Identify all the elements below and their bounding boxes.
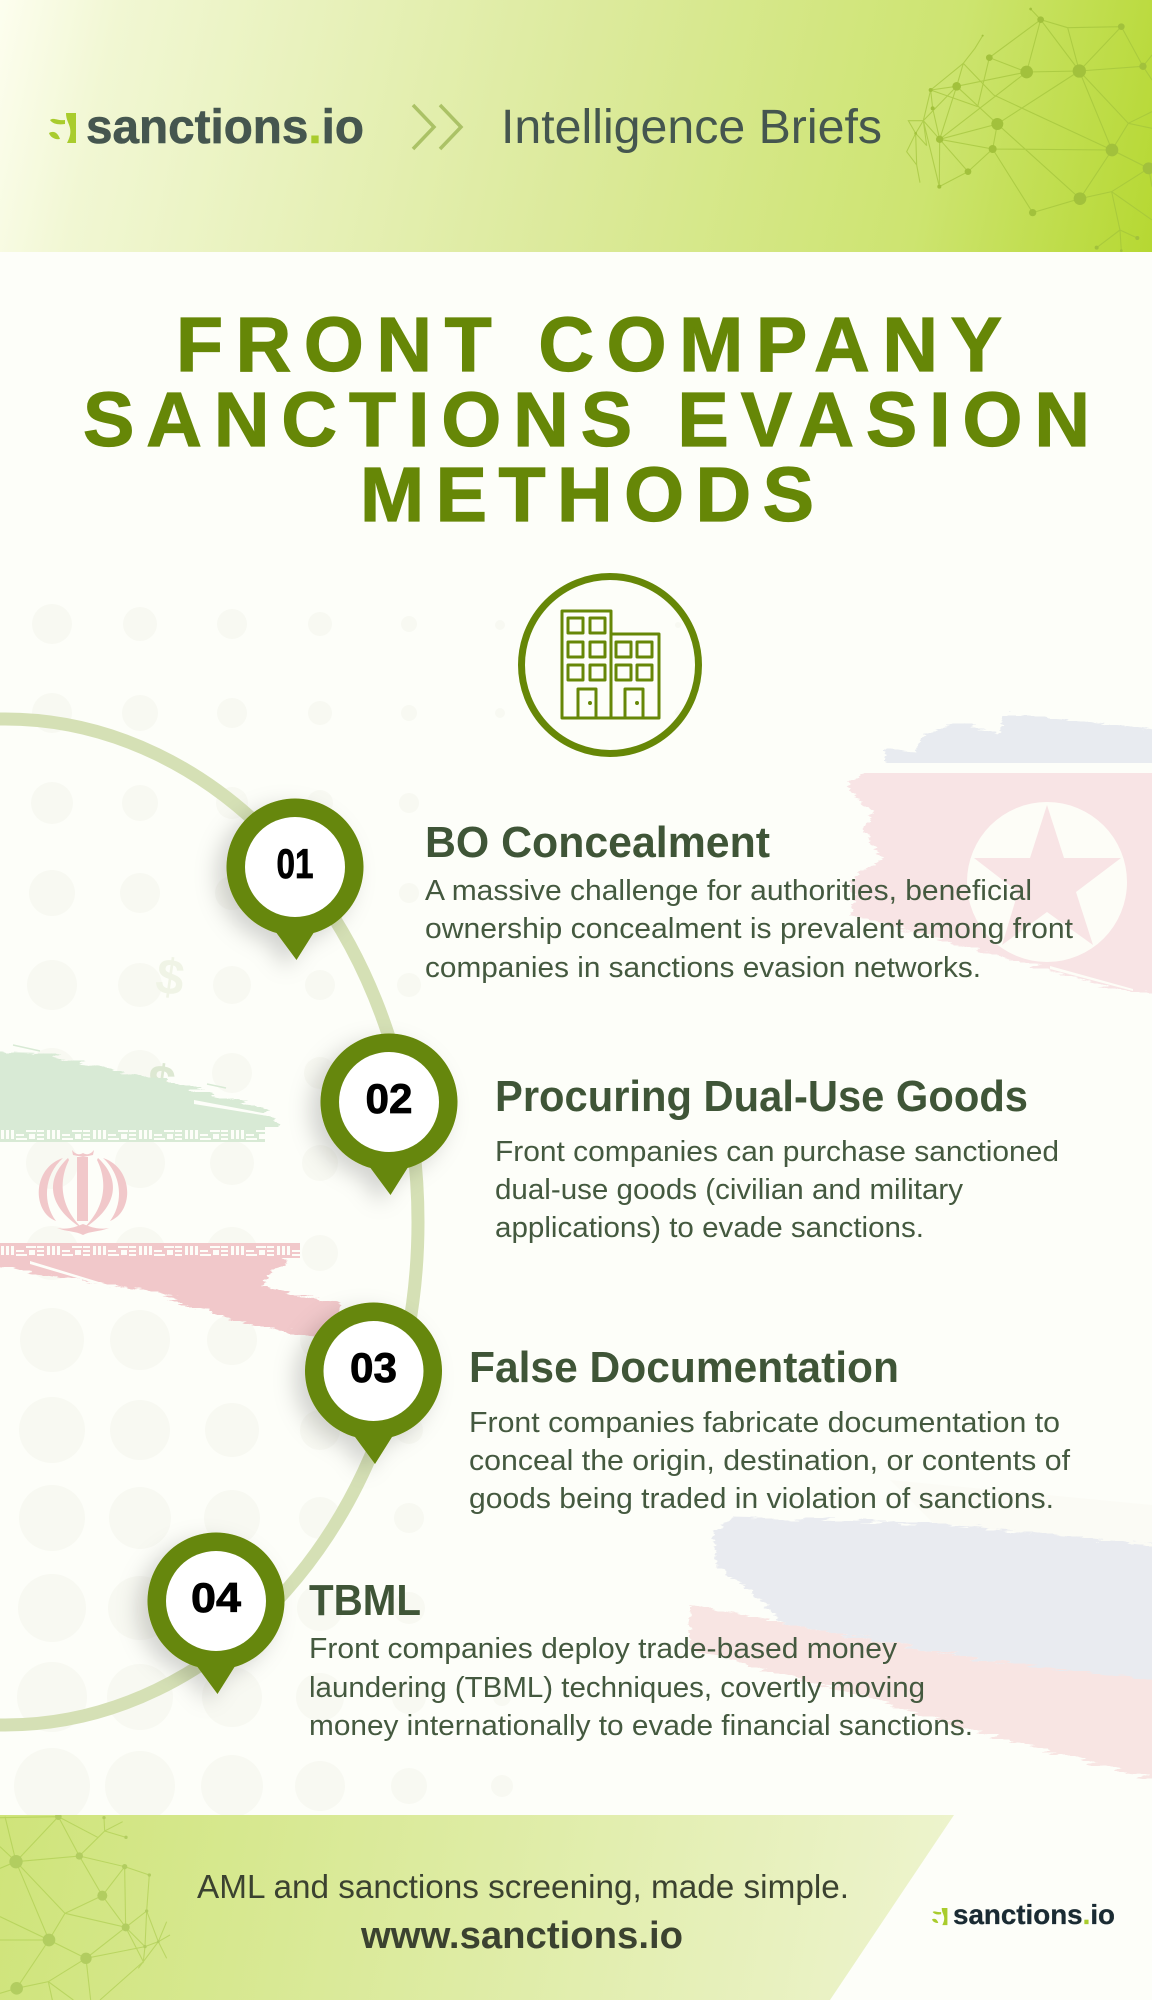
header label: Intelligence Briefs [501,101,882,154]
timeline arc [0,719,418,1725]
step 1 text: BO Concealment [425,818,770,867]
step 4 text: Front companies deploy trade-based money [309,1633,898,1665]
decorative dollar signs: $ [143,1053,179,1113]
step 4 text [309,1576,973,1742]
step 2 text [495,1072,1059,1244]
flag brush: North Korea [844,715,1152,992]
step 1 text: companies in sanctions evasion networks. [425,952,981,984]
step 2 text: Procuring Dual-Use Goods [495,1072,1028,1121]
decorative dollar signs: $ [152,947,188,1007]
pin 03: 03 [350,1344,397,1391]
decorative dollar signs [143,947,188,1113]
pin 04: 04 [191,1574,242,1621]
step 4 text: TBML [309,1576,421,1625]
step 3 text: Front companies fabricate documentation to [469,1407,1060,1439]
step 4 text: laundering (TBML) techniques, covertly moving [309,1672,925,1704]
network graphic [907,8,1152,252]
title: METHODS [360,452,814,538]
footer logo: sanctions.io [953,1899,1115,1930]
step 3 text [469,1343,1071,1515]
step 4 text: money internationally to evade financial sanctions. [309,1710,973,1742]
step 2 text: Front companies can purchase sanctioned [495,1136,1059,1168]
pin 04 [148,1533,284,1694]
pin 01 [226,799,364,960]
step 3 text: False Documentation [469,1343,899,1392]
icon: double chevron arrow [413,105,461,149]
icon: office buildings in circle [522,576,698,754]
background dot pattern [14,604,681,1824]
footer band [0,1813,954,2000]
flag brush: Russia [690,1480,1152,1785]
step 1 text: A massive challenge for authorities, beneficial [425,875,1032,907]
logo: sanctions.io: sanctions.io [86,101,364,154]
pin 03 [305,1303,442,1464]
step 1 text [425,818,1073,984]
pin 02 [320,1034,458,1195]
footer tagline: AML and sanctions screening, made simple. [197,1868,849,1905]
title [83,302,1090,538]
step 1 text: ownership concealment is prevalent among front [425,913,1073,945]
pin 01: 01 [276,840,314,887]
header band [0,0,1152,252]
step 3 text: conceal the origin, destination, or contents of [469,1445,1071,1477]
footer network graphic [0,1813,170,2000]
flag brush: Iran [0,1045,340,1337]
Iran emblem [39,1150,127,1235]
pin 02: 02 [366,1075,412,1122]
footer website: www.sanctions.io [360,1915,683,1957]
step 2 text: applications) to evade sanctions. [495,1212,924,1244]
step 2 text: dual-use goods (civilian and military [495,1174,964,1206]
title: SANCTIONS EVASION [83,377,1090,463]
title: FRONT COMPANY [176,302,1002,388]
step 3 text: goods being traded in violation of sanctions. [469,1483,1054,1515]
